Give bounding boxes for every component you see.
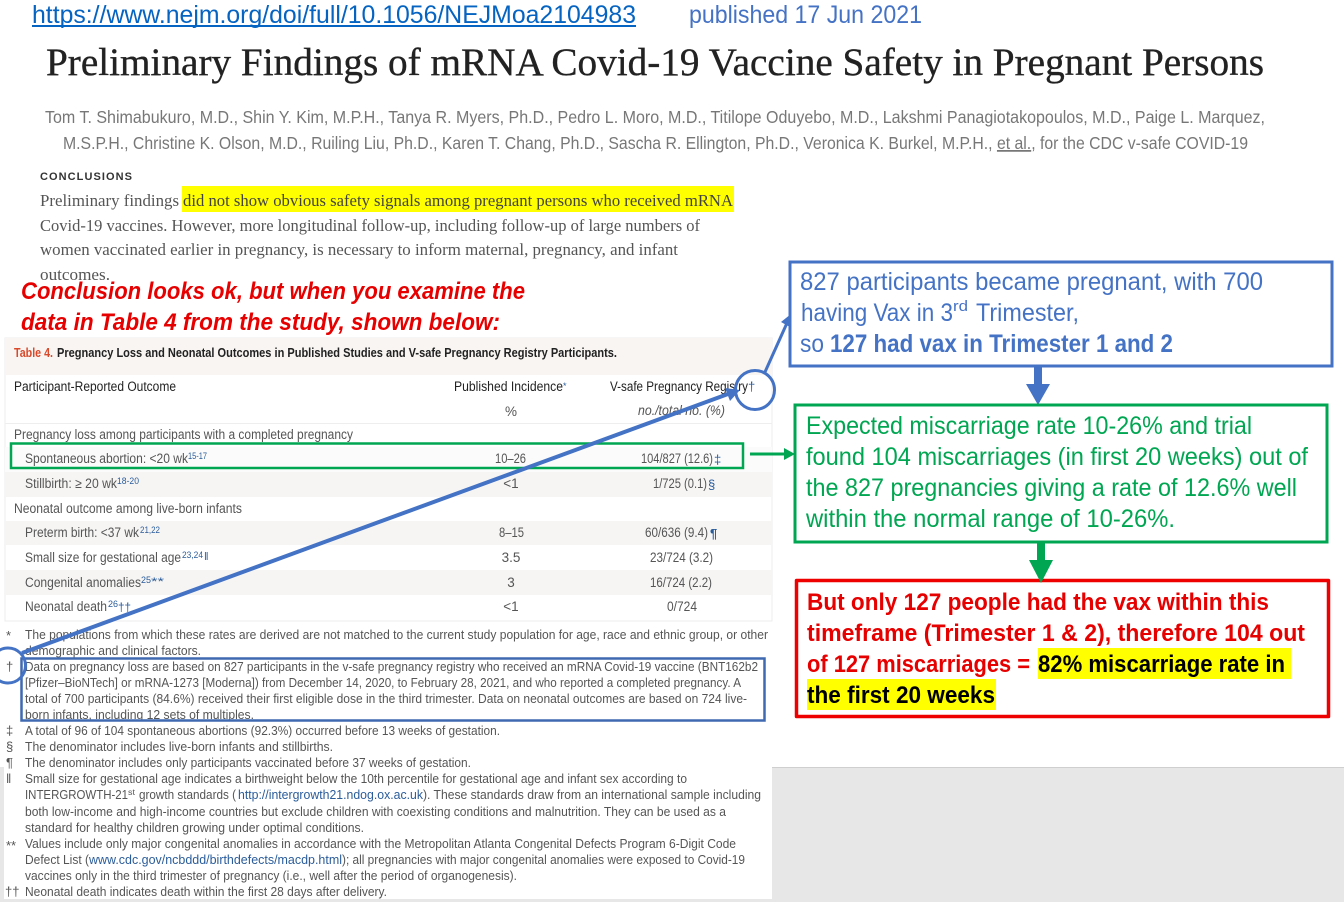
panel: green callout: Expected miscarriage rate 10-26% and trial — [806, 412, 1252, 440]
table rows: neonatal outcomes: 25 — [141, 575, 151, 585]
footnotes: ‡ — [6, 723, 13, 738]
panel: blue callout: so — [800, 330, 824, 358]
footnotes: ¶ — [6, 755, 13, 770]
table rows: neonatal outcomes: ** — [151, 576, 165, 588]
footnotes: standard for healthy children growing under optimal conditions. — [25, 820, 364, 835]
icon: circle around footnote dagger — [0, 648, 26, 683]
footnotes: †† — [5, 884, 19, 899]
panel: blue callout: 127 had vax in Trimester 1 and 2 — [830, 330, 1173, 358]
icon: circle around table header dagger — [736, 370, 774, 410]
panel: red callout: But only 127 people had the vax within this — [807, 589, 1269, 616]
arrow: green box to red box — [1029, 542, 1053, 583]
source link and publication date: published 17 Jun 2021 — [689, 1, 922, 29]
table rows: neonatal outcomes: 8–15 — [499, 525, 524, 540]
table header: * — [563, 381, 567, 391]
panel: green callout: found 104 miscarriages (in first 20 weeks) out of — [806, 443, 1308, 471]
arrow: footnote dagger to table header dagger — [22, 388, 740, 653]
table title: Table 4. — [14, 345, 53, 360]
authors: M.S.P.H., Christine K. Olson, M.D., Ruiling Liu, Ph.D., Karen T. Chang, Ph.D., Sascha R. Ellington, Ph.D., Veronica K. Burkel, M.P.H., et al., for the CDC v-safe COVID-19 — [63, 133, 1248, 153]
table rows: neonatal outcomes: 3 — [507, 575, 515, 590]
footnotes: Data on pregnancy loss are based on 827 participants in the v-safe pregnancy registry who received an mRNA Covid-19 vaccine (BNT162b2 — [25, 659, 758, 674]
table header: Published Incidence — [454, 379, 563, 394]
panel: blue callout: 827 participants became pregnant, with 700 — [800, 268, 1263, 296]
source link and publication date — [32, 1, 922, 29]
panel: blue callout: Trimester, — [976, 299, 1079, 327]
table rows: pregnancy loss: Spontaneous abortion: <20 wk — [25, 451, 188, 466]
red comment heading — [21, 278, 525, 336]
table rows: pregnancy loss: 104/827 (12.6) — [641, 451, 713, 466]
conclusions text block: Preliminary findings — [40, 191, 179, 210]
panel: blue callout — [790, 262, 1332, 366]
panel: green callout: within the normal range of 10-26%. — [805, 505, 1175, 533]
footnotes: Neonatal death indicates death within the first 28 days after delivery. — [25, 884, 387, 899]
footnotes: * — [6, 628, 11, 643]
panel: red callout: timeframe (Trimester 1 & 2), therefore 104 out — [807, 620, 1305, 647]
table rows: neonatal outcomes: 21,22 — [140, 525, 160, 535]
table rows: pregnancy loss: ‡ — [714, 452, 721, 467]
table header: % — [505, 404, 517, 419]
footnotes: Defect List ( — [25, 852, 90, 867]
footnotes: [Pfizer–BioNTech] or mRNA-1273 [Moderna]) from December 14, 2020, to February 28, 2021, and who reported a completed pregnancy. A — [25, 675, 741, 690]
footnotes: http://intergrowth21.ndog.ox.ac.uk — [238, 787, 423, 802]
panel: blue callout: rd — [953, 298, 968, 315]
panel: red callout: the first 20 weeks — [807, 682, 995, 709]
footnotes: † — [6, 659, 13, 674]
conclusions text block: Covid-19 vaccines. However, more longitudinal follow-up, including follow-up of large numbers of — [40, 216, 700, 235]
panel: red callout: of 127 miscarriages = — [807, 651, 1030, 678]
table rows: neonatal outcomes: 23/724 (3.2) — [650, 550, 713, 565]
table title: Pregnancy Loss and Neonatal Outcomes in Published Studies and V-safe Pregnancy Registry Participants. — [57, 345, 617, 360]
conclusions text block — [40, 171, 734, 284]
table rows: neonatal outcomes: 0/724 — [667, 599, 697, 614]
footnotes: ); all pregnancies with major congenital anomalies were exposed to Covid-19 — [342, 852, 745, 867]
table rows: neonatal outcomes: 26 — [108, 599, 118, 609]
footnotes: The denominator includes live-born infants and stillbirths. — [25, 739, 333, 754]
table rows: neonatal outcomes: ‖ — [204, 551, 209, 563]
authors: Tom T. Shimabukuro, M.D., Shin Y. Kim, M.P.H., Tanya R. Myers, Ph.D., Pedro L. Moro, M.D., Titilope Oduyebo, M.D., Lakshmi Panagiotakopoulos, M.D., Paige L. Marquez, — [45, 107, 1265, 127]
conclusions text block: CONCLUSIONS — [40, 171, 132, 183]
footnotes: vaccines only in the third trimester of pregnancy (i.e., well after the period of organogenesis). — [25, 868, 517, 883]
conclusions text block: women vaccinated earlier in pregnancy, is necessary to inform maternal, pregnancy, and infant — [40, 240, 678, 259]
panel: blue callout: having Vax in 3 — [801, 299, 953, 327]
table rows: neonatal outcomes: Congenital anomalies — [25, 575, 141, 590]
footnotes: A total of 96 of 104 spontaneous abortions (92.3%) occurred before 13 weeks of gestation. — [25, 723, 500, 738]
table rows: neonatal outcomes: 60/636 (9.4) — [645, 525, 708, 540]
table header: V-safe Pregnancy Registry — [610, 379, 748, 394]
table header — [14, 379, 755, 419]
table rows: neonatal outcomes — [14, 501, 717, 614]
table header: no./total no. (%) — [638, 403, 725, 418]
table header: † — [748, 379, 755, 394]
footnotes: ‖ — [6, 771, 11, 786]
footnotes: The denominator includes only participants vaccinated before 37 weeks of gestation. — [25, 755, 471, 770]
panel: red callout — [796, 580, 1328, 716]
title: Preliminary Findings of mRNA Covid-19 Vaccine Safety in Pregnant Persons — [46, 41, 1264, 84]
table rows: neonatal outcomes: Neonatal death — [25, 599, 107, 614]
table rows: pregnancy loss: 18-20 — [117, 476, 139, 486]
table rows: pregnancy loss: § — [708, 477, 715, 492]
footnotes: both low-income and high-income countries but exclude children with coexisting conditions and malnutrition. They can be used as a — [25, 804, 727, 819]
table rows: pregnancy loss: <1 — [503, 476, 519, 491]
source link and publication date: https://www.nejm.org/doi/full/10.1056/NEJMoa2104983 — [32, 1, 636, 29]
table rows: pregnancy loss: 10–26 — [495, 451, 526, 466]
table rows: neonatal outcomes: Small size for gestational age — [25, 550, 181, 565]
footnotes: born infants, including 12 sets of multiples. — [25, 707, 254, 722]
table rows: neonatal outcomes: †† — [118, 600, 131, 614]
conclusions text block: outcomes. — [40, 265, 110, 284]
footnotes: ). These standards draw from an international sample including — [423, 787, 761, 802]
footnotes: www.cdc.gov/ncbddd/birthdefects/macdp.html — [88, 852, 342, 867]
footnotes: Values include only major congenital anomalies in accordance with the Metropolitan Atlanta Congenital Defects Program 6-Digit Code — [25, 836, 736, 851]
table header: Participant-Reported Outcome — [14, 379, 176, 394]
green highlight box: spontaneous abortion row — [11, 444, 743, 468]
panel: table 4 — [5, 338, 772, 621]
footnotes — [5, 627, 769, 899]
table rows: pregnancy loss: Pregnancy loss among participants with a completed pregnancy — [14, 427, 353, 442]
table rows: pregnancy loss — [14, 427, 721, 492]
footnotes: The populations from which these rates are derived are not matched to the current study population for age, race and ethnic group, or other — [25, 627, 769, 642]
panel: green callout — [795, 405, 1327, 542]
arrow: table header dagger to blue box — [765, 314, 791, 372]
footnotes: growth standards ( — [139, 787, 237, 802]
footnotes: Small size for gestational age indicates a birthweight below the 10th percentile for gestational age and infant sex according to — [25, 771, 687, 786]
red comment heading: Conclusion looks ok, but when you examine the — [21, 278, 525, 305]
panel: green callout: the 827 pregnancies giving a rate of 12.6% well — [806, 474, 1297, 502]
footnotes: INTERGROWTH-21 — [25, 787, 128, 802]
panel: red callout: 82% miscarriage rate in — [1038, 651, 1285, 678]
conclusions text block: did not show obvious safety signals among pregnant persons who received mRNA — [183, 191, 734, 210]
table rows: neonatal outcomes: 3.5 — [502, 550, 520, 565]
arrow: table row to green box — [750, 448, 795, 460]
footnotes: demographic and clinical factors. — [25, 643, 201, 658]
footnotes: st — [128, 788, 136, 797]
footnotes: total of 700 participants (84.6%) received their first eligible dose in the third trimester. Data on neonatal outcomes are based on 724 live- — [25, 691, 747, 706]
table rows: neonatal outcomes: Preterm birth: <37 wk — [25, 525, 139, 540]
table rows: neonatal outcomes: 23,24 — [182, 550, 203, 560]
blue highlight box: footnote on pregnancy loss data — [22, 658, 764, 720]
red comment heading: data in Table 4 from the study, shown below: — [21, 309, 500, 336]
table rows: neonatal outcomes: Neonatal outcome among live-born infants — [14, 501, 242, 516]
authors — [45, 107, 1265, 153]
table rows: neonatal outcomes: 16/724 (2.2) — [650, 575, 712, 590]
footnotes: ** — [6, 838, 16, 853]
table rows: pregnancy loss: 1/725 (0.1) — [653, 476, 707, 491]
table rows: neonatal outcomes: <1 — [503, 599, 519, 614]
arrow: blue box to green box — [1026, 366, 1050, 405]
table rows: neonatal outcomes: ¶ — [710, 526, 717, 541]
table rows: pregnancy loss: 15-17 — [188, 451, 207, 461]
footnotes: § — [6, 739, 13, 754]
table rows: pregnancy loss: Stillbirth: ≥ 20 wk — [25, 476, 117, 491]
